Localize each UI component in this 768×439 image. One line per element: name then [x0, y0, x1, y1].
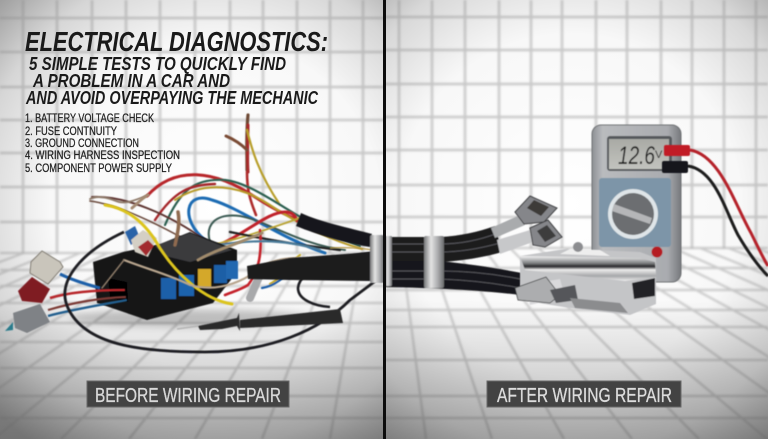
subtitle: 5 SIMPLE TESTS TO QUICKLY FIND: [29, 54, 286, 74]
red lead: [664, 145, 768, 266]
centre divider: [383, 0, 386, 439]
second lead loop: [298, 252, 382, 307]
blue and red upper connector: [125, 226, 140, 245]
list of five tests: 2. FUSE CONTNUITY: [25, 126, 117, 138]
heading: ELECTRICAL DIAGNOSTICS:: [25, 26, 328, 57]
label: after wiring repair: AFTER WIRING REPAIR: [497, 385, 672, 407]
floor shadow: [70, 309, 310, 327]
red connector: [18, 277, 50, 303]
probe: [177, 309, 343, 331]
subtitle: AND AVOID OVERPAYING THE MECHANIC: [25, 88, 319, 108]
harness clamps: [424, 236, 444, 288]
red button: [652, 246, 662, 258]
black lead: [662, 161, 768, 276]
black test lead and probe: [65, 232, 382, 352]
list of five tests: 3. GROUND CONNECTION: [25, 138, 139, 150]
tangled bundle of coloured wires: [90, 175, 362, 295]
panel: after (right background with wall and floor grid): [384, 0, 768, 439]
fuse box: [93, 232, 238, 320]
label: after wiring repair: [487, 381, 681, 407]
left harness sleeve and clamp: [247, 213, 384, 283]
grey connector: [13, 304, 50, 333]
dial panel: [599, 178, 671, 247]
label: before wiring repair: [87, 381, 289, 407]
frayed end terminals: [90, 196, 146, 202]
chrome terminals: [491, 196, 562, 254]
tidy braided harness after repair: [384, 196, 562, 295]
panel: before (left background with wall and floor grid): [0, 0, 384, 439]
lcd display: [607, 136, 672, 171]
lcd display: V: [655, 149, 663, 161]
blue and yellow fuses: [161, 261, 238, 299]
list of five tests: 1. BATTERY VOLTAGE CHECK: [25, 113, 154, 125]
test leads: [662, 145, 768, 276]
messy wiring before repair: [70, 115, 362, 327]
label: before wiring repair: BEFORE WIRING REPAIR: [95, 385, 281, 407]
meter body: [592, 125, 681, 282]
list of five tests: 4. WIRING HARNESS INSPECTION: [25, 150, 180, 162]
braided bundle: [384, 226, 502, 264]
multimeter: [592, 125, 681, 282]
title block: [25, 26, 328, 175]
lcd display: 12.6: [618, 142, 655, 170]
test lead cable: [65, 232, 382, 352]
list of five tests: 5. COMPONENT POWER SUPPLY: [25, 163, 172, 175]
yellow and frayed wires over the fuse box: [102, 195, 300, 304]
list of five tests: [25, 113, 180, 175]
subtitle: [25, 54, 319, 108]
loose connectors on the left: [5, 226, 157, 333]
wires to connectors: [48, 274, 127, 316]
chrome connector housing: [515, 242, 656, 315]
beige connector: [30, 251, 63, 284]
subtitle: A PROBLEM IN A CAR AND: [32, 71, 230, 91]
rising red and yellow wires: [226, 115, 280, 215]
